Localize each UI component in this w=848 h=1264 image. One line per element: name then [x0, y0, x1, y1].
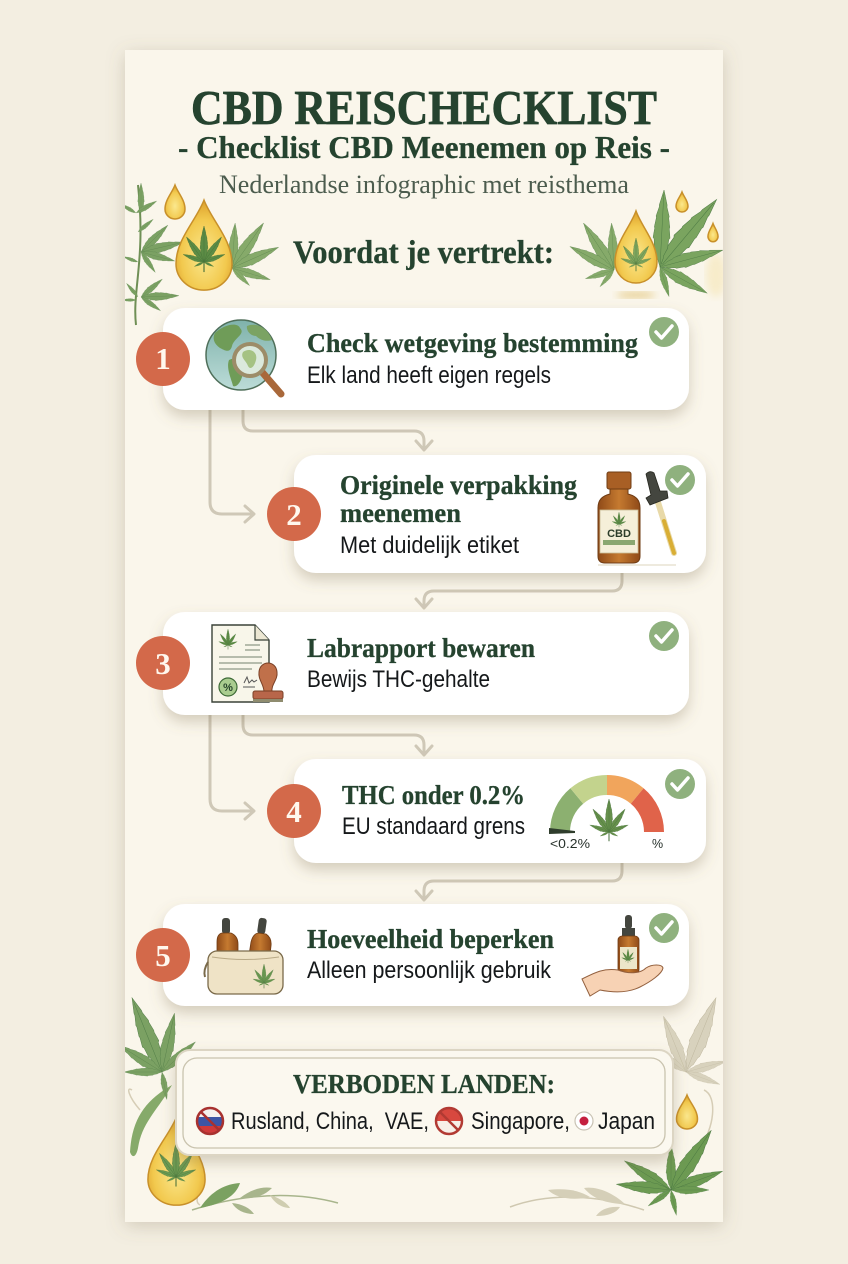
arrow: step 4 to step 5	[416, 860, 622, 900]
icon: lab report with stamp: %	[223, 682, 233, 694]
panel: step 2	[267, 455, 706, 573]
heading: VERBODEN LANDEN:	[293, 1069, 555, 1099]
description: Alleen persoonlijk gebruik	[307, 957, 552, 984]
step number 5	[136, 928, 190, 982]
country list part 2: Singapore,	[471, 1108, 570, 1135]
decoration: bottom left plants	[117, 995, 338, 1214]
heading: Hoeveelheid beperken	[307, 924, 554, 954]
description: Bewijs THC-gehalte	[307, 666, 490, 693]
step number 4	[267, 784, 321, 838]
icon: travel pouch with bottles	[204, 918, 283, 994]
arrow: step 2 to step 3	[416, 570, 622, 608]
icon: hand holding bottle	[582, 915, 663, 996]
description: EU standaard grens	[342, 813, 525, 840]
heading: Labrapport bewaren	[307, 633, 535, 663]
decoration: top right plants and oil drops	[567, 190, 726, 298]
icon: lab report with stamp	[212, 625, 283, 702]
arrow: step 1 to step 2 (outer)	[210, 408, 254, 522]
icon: CBD bottle and dropper	[598, 472, 676, 565]
panel: step 5	[136, 904, 689, 1006]
country list part 1: Rusland, China, VAE,	[231, 1108, 429, 1135]
step number 1: 1	[155, 341, 171, 376]
heading: before departure: Voordat je vertrekt:	[293, 235, 554, 271]
heading: meenemen	[340, 498, 461, 528]
icon: Russia prohibited	[196, 1107, 224, 1136]
chart: THC gauge: <0.2%	[550, 837, 590, 851]
panel: poster sheet	[125, 50, 723, 1222]
icon: check mark	[665, 769, 695, 799]
icon: check mark	[649, 317, 679, 347]
heading: Check wetgeving bestemming	[307, 328, 638, 358]
step number 2	[267, 487, 321, 541]
panel: step 1	[136, 308, 689, 410]
arrow: step 3 to step 4 (outer)	[210, 712, 254, 819]
icon: check mark	[649, 621, 679, 651]
country list part 3: Japan	[598, 1108, 655, 1135]
step number 3: 3	[155, 646, 171, 681]
icon: globe with magnifier	[206, 320, 281, 394]
description: Elk land heeft eigen regels	[307, 362, 551, 389]
tagline: Nederlandse infographic met reisthema	[219, 170, 629, 199]
heading: THC onder 0.2%	[342, 780, 525, 810]
arrow: step 3 to step 4 (inner)	[243, 712, 432, 755]
title: CBD REISCHECKLIST	[191, 80, 657, 135]
decoration: bottom right plants	[510, 995, 728, 1216]
icon: check mark	[665, 465, 695, 495]
icon: Singapore prohibited	[435, 1107, 463, 1135]
subtitle: - Checklist CBD Meenemen op Reis -	[178, 129, 670, 165]
panel: step 4	[267, 759, 706, 863]
arrow: step 1 to step 2 (inner)	[243, 408, 432, 450]
chart: THC gauge	[549, 775, 664, 851]
panel: step 3	[136, 612, 689, 715]
step number 3	[136, 636, 190, 690]
step number 4: 4	[286, 794, 302, 829]
step number 5: 5	[155, 938, 171, 973]
chart: THC gauge: %	[652, 837, 663, 851]
description: Met duidelijk etiket	[340, 532, 519, 559]
icon: Japan flag	[575, 1112, 593, 1130]
step number 2: 2	[286, 497, 302, 532]
decoration: top left plants and oil drops	[119, 183, 281, 325]
icon: check mark	[649, 913, 679, 943]
icon: CBD bottle and dropper: CBD	[607, 528, 631, 540]
leaf beside the large drop	[228, 222, 279, 286]
panel: forbidden countries	[176, 1050, 673, 1155]
heading: Originele verpakking	[340, 470, 577, 500]
step number 1	[136, 332, 190, 386]
